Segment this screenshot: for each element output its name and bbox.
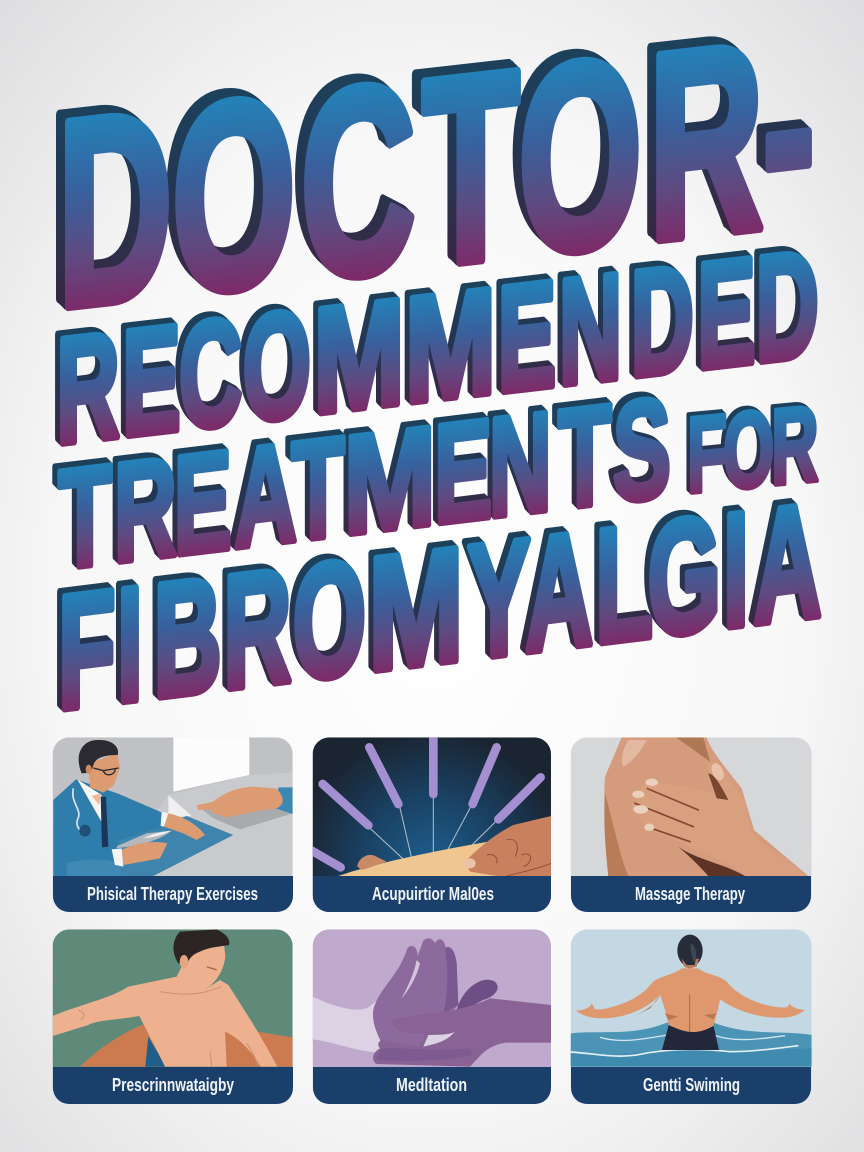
- caption bar: swimming: [571, 1067, 811, 1104]
- title line: FIBROMYALGIA: [58, 469, 822, 745]
- caption: Gentti Swiming: Gentti Swiming: [643, 1074, 740, 1095]
- panel: massage therapy: [571, 737, 812, 912]
- title line: FIBROMYALGIA: FIBRO: [58, 525, 366, 745]
- caption: Prescrinnwataigby: Prescrinnwataigby: [112, 1074, 235, 1095]
- title line: RECOMMENDED: RECO: [56, 279, 311, 477]
- caption bar: physical therapy: [53, 876, 293, 912]
- title line: RECOMMENDED: ENDED: [498, 219, 819, 425]
- caption bar: acupuncture: [313, 876, 551, 912]
- title line: FIBROMYALGIA: M: [368, 512, 464, 706]
- title line: FIBROMYALGIA: YALGIA: [467, 469, 822, 695]
- title line: TREATMENTS: TREAT: [58, 408, 345, 600]
- title line: RECOMMENDED: [56, 219, 819, 477]
- title line: TREATMENTS: ENTS: [434, 368, 671, 555]
- panel: physical therapy exercises: [53, 737, 293, 912]
- caption bar: meditation: [313, 1067, 551, 1104]
- caption bar: prescription: [53, 1067, 293, 1104]
- title line: RECOMMENDED: MM: [313, 257, 496, 447]
- caption: Phisical Therapy Exercises: Phisical Therapy Exercises: [87, 883, 258, 904]
- title: [56, 0, 822, 745]
- panel: prescription medication: [53, 929, 293, 1104]
- title line: FOR: FOR: [687, 383, 819, 516]
- panel: gentle swimming: [571, 929, 812, 1104]
- panel: meditation: [313, 929, 551, 1104]
- title line: TREATMENTS: [58, 368, 671, 600]
- title line: TREATMENTS: M: [343, 397, 436, 566]
- caption bar: massage: [571, 876, 811, 912]
- panel: acupuncture needles: [312, 735, 551, 912]
- caption: Massage Therapy: Massage Therapy: [635, 883, 746, 904]
- caption: Meditation: Medltation: [396, 1074, 467, 1095]
- caption: Acupuntior Mal0es: Acupuirtior Mal0es: [372, 883, 494, 904]
